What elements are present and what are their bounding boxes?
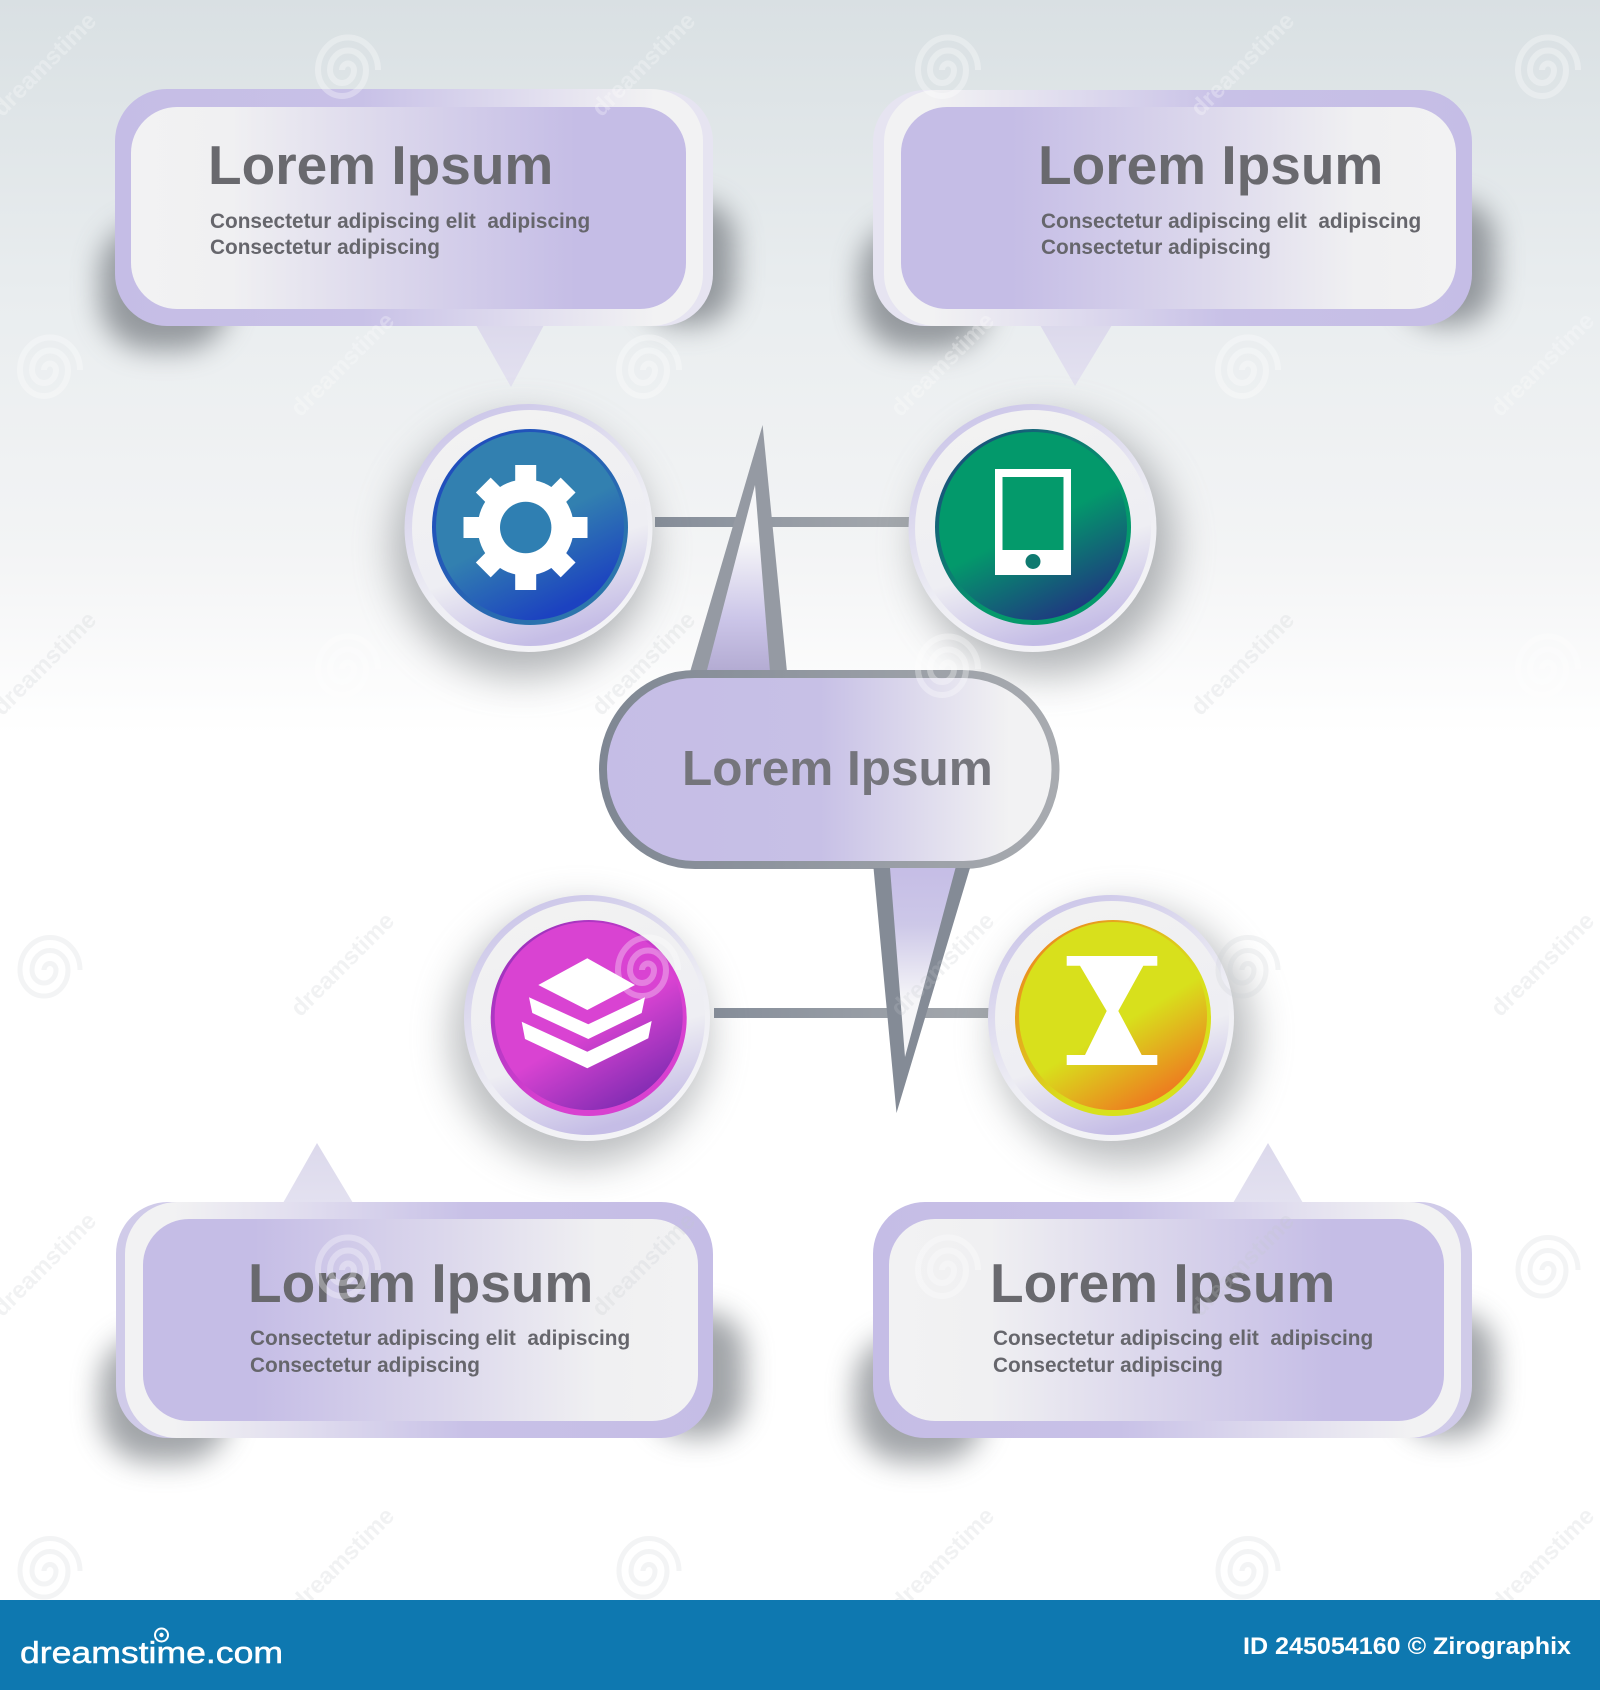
watermark overlay: dreamstime: [1186, 8, 1300, 122]
text: top left callout: Consectetur adipiscing elit adipiscing: [210, 210, 590, 233]
text: bottom left callout: Consectetur adipiscing: [250, 1354, 480, 1377]
panel: bottom right callout: [855, 1143, 1495, 1462]
text: top right callout: [901, 107, 1456, 309]
watermark overlay: dreamstime: [587, 8, 701, 122]
watermark overlay: dreamstime: [286, 308, 400, 422]
arrow: bottom spike: [874, 868, 970, 1113]
connector line: bottom: [714, 1008, 990, 1018]
panel: centre label: Lorem Ipsum: [682, 741, 993, 796]
watermark overlay: dreamstime: [1186, 1208, 1300, 1322]
text: bottom left callout: [143, 1219, 698, 1421]
text: top right callout: Lorem Ipsum: [1038, 134, 1383, 196]
watermark overlay: dreamstime: [286, 908, 400, 1022]
connector line: top: [655, 517, 910, 527]
footer credit: ID 245054160 © Zirographix: [1243, 1633, 1572, 1660]
watermark overlay: dreamstime: [1486, 908, 1600, 1022]
watermark overlay: dreamstime: [587, 607, 701, 721]
watermark overlay: dreamstime: [286, 1503, 400, 1617]
text: top left callout: Consectetur adipiscing: [210, 236, 440, 259]
text: bottom left callout: Consectetur adipiscing elit adipiscing: [250, 1327, 630, 1350]
background gradient: [0, 0, 1600, 735]
text: top right callout: Consectetur adipiscing elit adipiscing: [1041, 210, 1421, 233]
panel: centre label: [603, 674, 1056, 865]
watermark overlay: dreamstime: [886, 908, 1000, 1022]
text: bottom right callout: Lorem Ipsum: [990, 1252, 1335, 1314]
icon: hourglass button: [988, 895, 1252, 1164]
arrow: top spike: [690, 425, 787, 672]
footer bar: [0, 1600, 1600, 1690]
text: bottom right callout: Consectetur adipiscing elit adipiscing: [993, 1327, 1373, 1350]
watermark overlay: dreamstime: [587, 1208, 701, 1322]
footer logo: dreamstime.com: [20, 1635, 283, 1670]
text: bottom right callout: Consectetur adipiscing: [993, 1354, 1223, 1377]
text: bottom left callout: Lorem Ipsum: [248, 1252, 593, 1314]
icon: layers button: [452, 895, 710, 1164]
text: top right callout: Consectetur adipiscing: [1041, 236, 1271, 259]
text: bottom right callout: [889, 1219, 1444, 1421]
text: top left callout: Lorem Ipsum: [208, 134, 553, 196]
text: top left callout: [131, 107, 686, 309]
panel: top right callout: [860, 90, 1495, 386]
panel: top left callout: [100, 89, 735, 387]
panel: bottom left callout: [100, 1143, 745, 1462]
watermark overlay: dreamstime: [886, 308, 1000, 422]
watermark overlay: dreamstime: [886, 1503, 1000, 1617]
icon: gear button: [394, 404, 652, 676]
icon: phone button: [908, 404, 1174, 674]
watermark overlay: dreamstime: [1486, 308, 1600, 422]
watermark overlay: dreamstime: [1186, 607, 1300, 721]
watermark overlay: dreamstime: [1486, 1503, 1600, 1617]
